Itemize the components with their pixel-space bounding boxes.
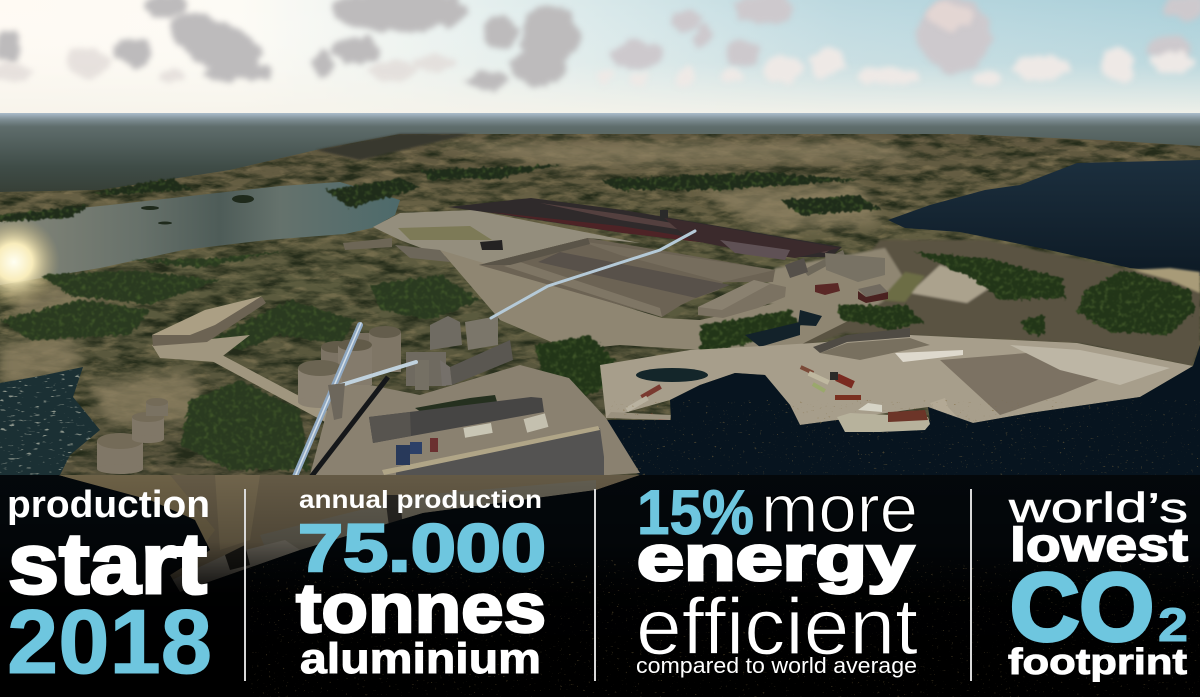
alumina plant towers <box>406 316 513 390</box>
divider 3 <box>970 489 972 681</box>
coastal pond <box>636 368 708 382</box>
open sea at horizon <box>0 113 1200 203</box>
number: 2018: 2018 <box>7 592 212 693</box>
left forests <box>0 250 480 470</box>
conveyor belts <box>272 231 695 530</box>
pale terrain patches <box>0 130 1200 475</box>
left tanks <box>97 398 168 474</box>
label: tonnes: tonnes <box>296 569 546 647</box>
harbour specks <box>610 400 1200 475</box>
dark conveyor shadow <box>311 377 388 477</box>
lower left water <box>0 367 100 475</box>
dark water under band <box>0 475 1200 697</box>
grass patch on apron <box>398 226 492 240</box>
divider 1 <box>244 489 246 681</box>
concrete lay-down yard <box>910 265 997 303</box>
label: production: production <box>7 484 210 526</box>
land mottling <box>0 130 1200 475</box>
label: footprint: footprint <box>1008 641 1187 682</box>
label: efficient: efficient <box>636 582 918 671</box>
smelter potline halls <box>448 198 842 260</box>
sunlit tan ground <box>0 142 920 425</box>
left bay water <box>0 182 400 285</box>
peninsula land <box>0 134 1200 475</box>
pale ground <box>1133 268 1200 293</box>
number: 15%: 15% <box>637 478 754 548</box>
water sun glints <box>0 367 100 475</box>
label: annual production: annual production <box>299 486 542 514</box>
stat: energy efficiency <box>636 471 918 678</box>
stat: lowest CO2 footprint <box>1008 484 1188 682</box>
stat: production start <box>7 484 212 693</box>
label: energy: energy <box>637 522 915 594</box>
service roads around east buildings <box>760 248 908 315</box>
east forest and land <box>760 240 1200 366</box>
supply ship <box>837 403 930 432</box>
label: world's: world’s <box>1008 484 1188 531</box>
right bay water <box>888 160 1200 276</box>
label: lowest: lowest <box>1010 518 1188 571</box>
port quay <box>600 328 1193 425</box>
road system near halls <box>440 250 870 350</box>
conveyor tower <box>328 383 345 420</box>
east tree stands <box>420 252 1195 420</box>
label: more: more <box>761 471 918 547</box>
divider 2 <box>594 489 596 681</box>
water speckles in band <box>250 560 1200 697</box>
stat: annual production <box>296 486 546 683</box>
left warehouse yard and road <box>152 335 335 422</box>
ponds <box>745 310 822 347</box>
note: compared to world average: compared to world average <box>636 653 917 678</box>
raw material yard <box>310 365 640 490</box>
lower coast, seen through band <box>58 475 640 592</box>
field <box>880 272 925 302</box>
storage warehouses <box>369 397 604 490</box>
islets <box>141 195 254 224</box>
aluminium casthouse halls <box>479 238 786 318</box>
apron <box>373 210 640 265</box>
label: subscript 2: 2 <box>1158 598 1188 651</box>
sun glare <box>0 216 60 308</box>
containers on quay <box>625 365 861 423</box>
label: start: start <box>8 516 207 612</box>
harbour water <box>606 345 1200 475</box>
far hillside shadow <box>316 134 470 160</box>
north shore forests <box>0 165 880 222</box>
east buildings <box>343 238 888 303</box>
sky with clouds <box>0 0 1200 114</box>
left warehouse <box>152 296 266 346</box>
number: 75.000: 75.000 <box>298 511 546 586</box>
pier <box>606 412 671 420</box>
trees by warehouses <box>415 395 498 418</box>
cement silos <box>298 326 401 408</box>
bottom dark band <box>0 475 1200 697</box>
label: CO: CO <box>1010 554 1154 661</box>
label: aluminium: aluminium <box>300 635 541 683</box>
